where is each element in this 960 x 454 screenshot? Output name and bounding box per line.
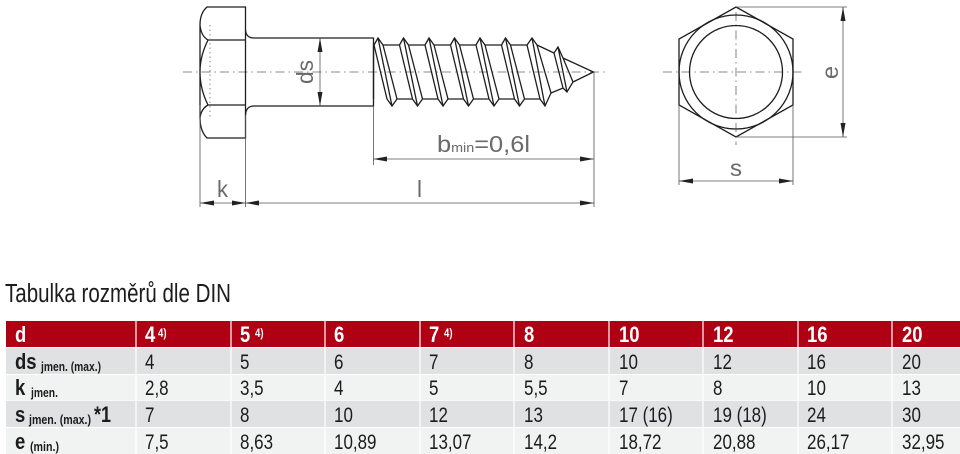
row: ds: 16 <box>807 350 826 375</box>
row: ds: 6 <box>334 350 343 375</box>
row: e: 14,2 <box>524 430 557 454</box>
row: s: 10 <box>334 403 353 428</box>
row: e: 20,88 <box>713 430 755 454</box>
table row backgrounds <box>6 321 960 454</box>
end view: hexagon head <box>663 7 847 185</box>
row: s: 12 <box>429 403 448 428</box>
header row: 4) <box>255 327 264 340</box>
row: k: 8 <box>713 376 722 401</box>
dimension: b min: bmin=0,6l <box>437 131 530 157</box>
row: e <box>15 430 944 454</box>
dimension: k <box>200 105 246 207</box>
row: ds: 8 <box>524 350 533 375</box>
row: ds: 12 <box>713 350 732 375</box>
row: k: 7 <box>619 376 628 401</box>
screw shank <box>246 30 374 115</box>
row: ds <box>15 350 921 375</box>
hexagon and circles <box>679 7 793 137</box>
dimension: ds: ds <box>292 60 318 84</box>
header row: 4) <box>158 327 167 340</box>
header row <box>15 324 923 347</box>
row: k: 5,5 <box>524 376 548 401</box>
row: s: *1 <box>94 402 111 427</box>
dimension: l: l <box>417 176 422 202</box>
dimension: e <box>736 7 847 137</box>
header row: 10 <box>619 324 640 347</box>
row: ds: 7 <box>429 350 438 375</box>
screw head <box>200 7 246 138</box>
row: e: 7,5 <box>145 430 169 454</box>
head hidden detail <box>209 25 211 118</box>
dimension: e: e <box>817 66 843 79</box>
table heading: Tabulka rozměrů dle DIN <box>5 280 231 308</box>
row: s: 24 <box>807 403 826 428</box>
row: ds: 5 <box>240 350 249 375</box>
row: k: k <box>15 377 26 400</box>
row: s: jmen. (max.) <box>28 412 91 427</box>
row: ds: 4 <box>145 350 155 375</box>
row: s: 7 <box>145 403 154 428</box>
row: k: jmen. <box>30 385 58 400</box>
row: e: 18,72 <box>619 430 661 454</box>
row: ds: ds <box>15 351 37 374</box>
row: k: 3,5 <box>240 376 264 401</box>
header row: 20 <box>902 324 923 347</box>
row: ds: 20 <box>902 350 921 375</box>
header row: 8 <box>524 324 534 347</box>
row: k: 2,8 <box>145 376 169 401</box>
row: e: e <box>15 431 25 454</box>
row: s: 19 (18) <box>713 403 767 428</box>
header row: 4 <box>145 324 156 347</box>
row: e: 10,89 <box>334 430 376 454</box>
dimension: s: s <box>730 155 742 181</box>
row: s: 17 (16) <box>619 403 673 428</box>
row: ds: 10 <box>619 350 638 375</box>
row: k <box>15 376 921 401</box>
dimension: k: k <box>217 176 228 202</box>
table header band <box>6 321 960 347</box>
row: s <box>15 402 921 428</box>
row: e: 13,07 <box>429 430 471 454</box>
header row: 7 <box>429 324 439 347</box>
row: k: 5 <box>429 376 438 401</box>
row: s: 8 <box>240 403 249 428</box>
row: s: 30 <box>902 403 921 428</box>
header row: 6 <box>334 324 344 347</box>
dimension table <box>6 321 960 454</box>
row: e: 26,17 <box>807 430 849 454</box>
dimension: s <box>679 105 793 185</box>
side view: lag screw drawing <box>183 7 606 207</box>
row: k: 4 <box>334 376 344 401</box>
row: k: 13 <box>902 376 921 401</box>
centre lines <box>663 12 803 145</box>
header row: 4) <box>444 327 453 340</box>
dimension: b min <box>374 106 594 165</box>
header row: 12 <box>713 324 734 347</box>
row: k: 10 <box>807 376 826 401</box>
dimension: ds <box>292 38 322 106</box>
row: e: 8,63 <box>240 430 273 454</box>
threaded section <box>374 38 594 106</box>
dimension: l <box>246 72 594 207</box>
centre line <box>183 71 606 73</box>
row: s: s <box>15 404 25 427</box>
row: s: 13 <box>524 403 543 428</box>
header row: d <box>15 324 26 347</box>
row: ds: jmen. (max.) <box>40 359 101 374</box>
row: e: (min.) <box>30 439 59 454</box>
header row: 16 <box>807 324 828 347</box>
row: e: 32,95 <box>902 430 944 454</box>
header row: 5 <box>240 324 250 347</box>
